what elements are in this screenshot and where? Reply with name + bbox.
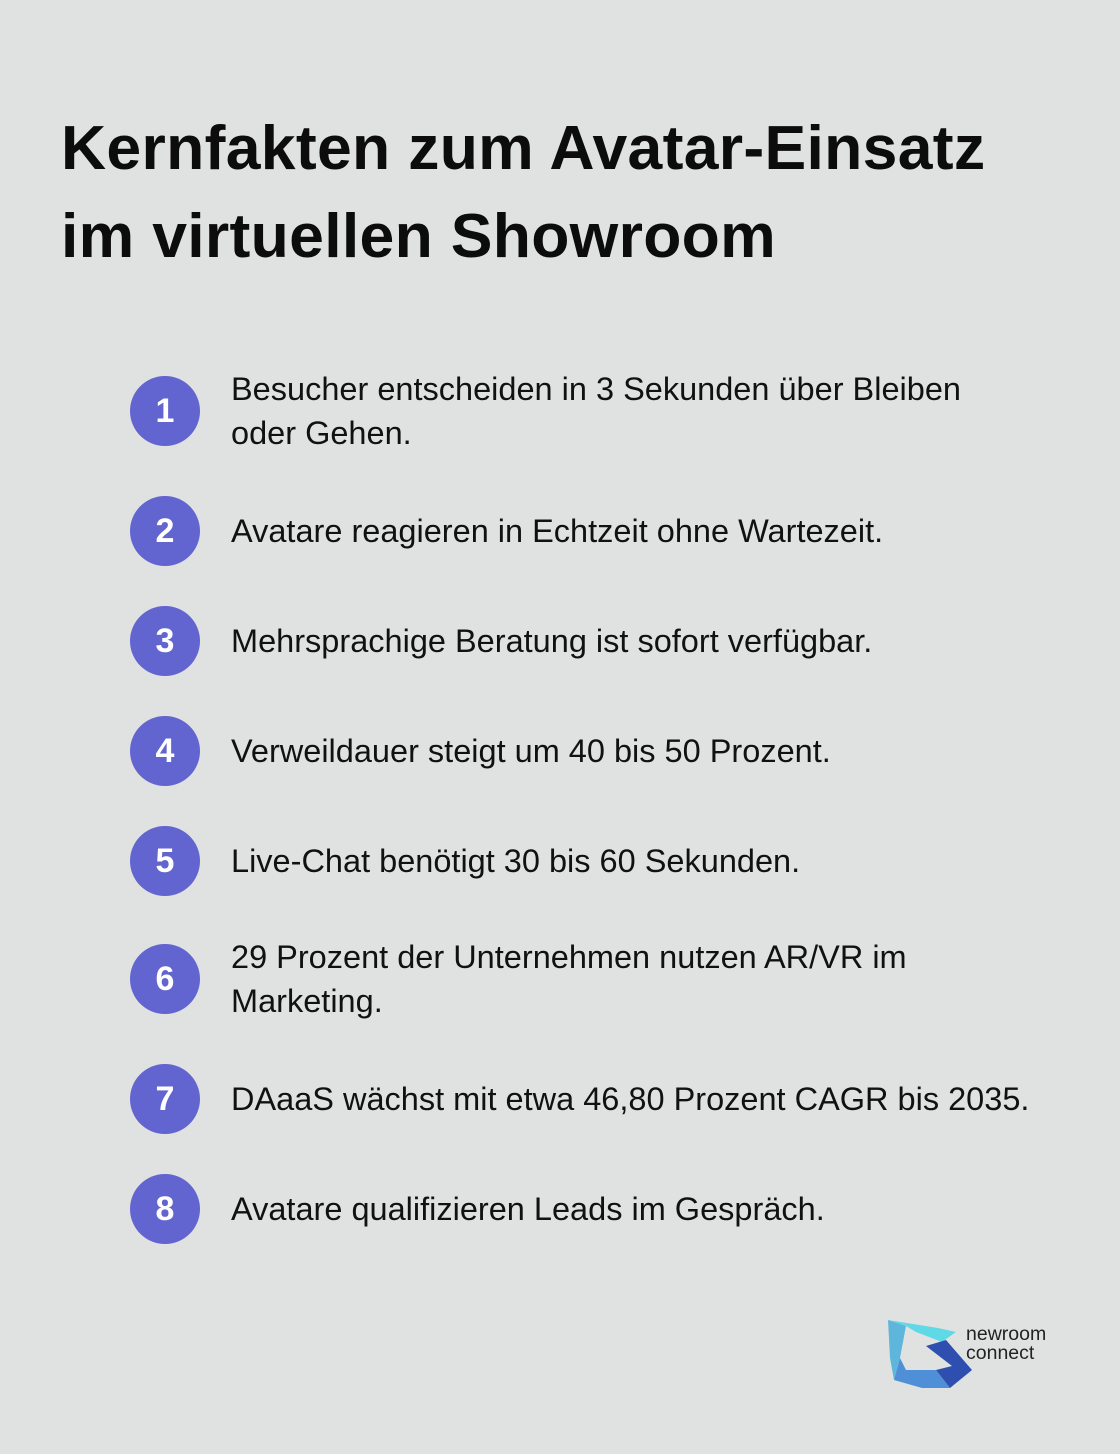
item 5 bbox=[130, 826, 800, 896]
item 7: 7 bbox=[156, 1080, 174, 1118]
title: im virtuellen Showroom bbox=[61, 201, 776, 271]
item 8: Avatare qualifizieren Leads im Gespräch. bbox=[231, 1191, 825, 1227]
item 3: 3 bbox=[156, 622, 174, 660]
item 3: Mehrsprachige Beratung ist sofort verfügbar. bbox=[231, 623, 872, 659]
item 3 bbox=[130, 606, 872, 676]
item 1: Besucher entscheiden in 3 Sekunden über Bleiben bbox=[231, 371, 961, 407]
item 5: 5 bbox=[156, 842, 174, 880]
logo bbox=[888, 1320, 1046, 1388]
logo: newroom bbox=[966, 1323, 1046, 1345]
item 6 bbox=[130, 939, 907, 1019]
item 4 bbox=[130, 716, 831, 786]
item 6: Marketing. bbox=[231, 983, 383, 1019]
item 6: 6 bbox=[156, 960, 174, 998]
title: Kernfakten zum Avatar-Einsatz bbox=[61, 113, 985, 183]
item 2: Avatare reagieren in Echtzeit ohne Wartezeit. bbox=[231, 513, 883, 549]
item 8: 8 bbox=[156, 1190, 174, 1228]
item 2: 2 bbox=[156, 512, 174, 550]
item 1 bbox=[130, 371, 961, 451]
item 4: Verweildauer steigt um 40 bis 50 Prozent. bbox=[231, 733, 831, 769]
item 6: 29 Prozent der Unternehmen nutzen AR/VR im bbox=[231, 939, 907, 975]
item 7 bbox=[130, 1064, 1029, 1134]
item 1: oder Gehen. bbox=[231, 415, 412, 451]
item 5: Live-Chat benötigt 30 bis 60 Sekunden. bbox=[231, 843, 800, 879]
item 2 bbox=[130, 496, 883, 566]
title bbox=[61, 113, 985, 271]
item 1: 1 bbox=[156, 392, 174, 430]
item 4: 4 bbox=[156, 732, 174, 770]
item 8 bbox=[130, 1174, 825, 1244]
item 7: DAaaS wächst mit etwa 46,80 Prozent CAGR bis 2035. bbox=[231, 1081, 1029, 1117]
logo: connect bbox=[966, 1342, 1034, 1364]
